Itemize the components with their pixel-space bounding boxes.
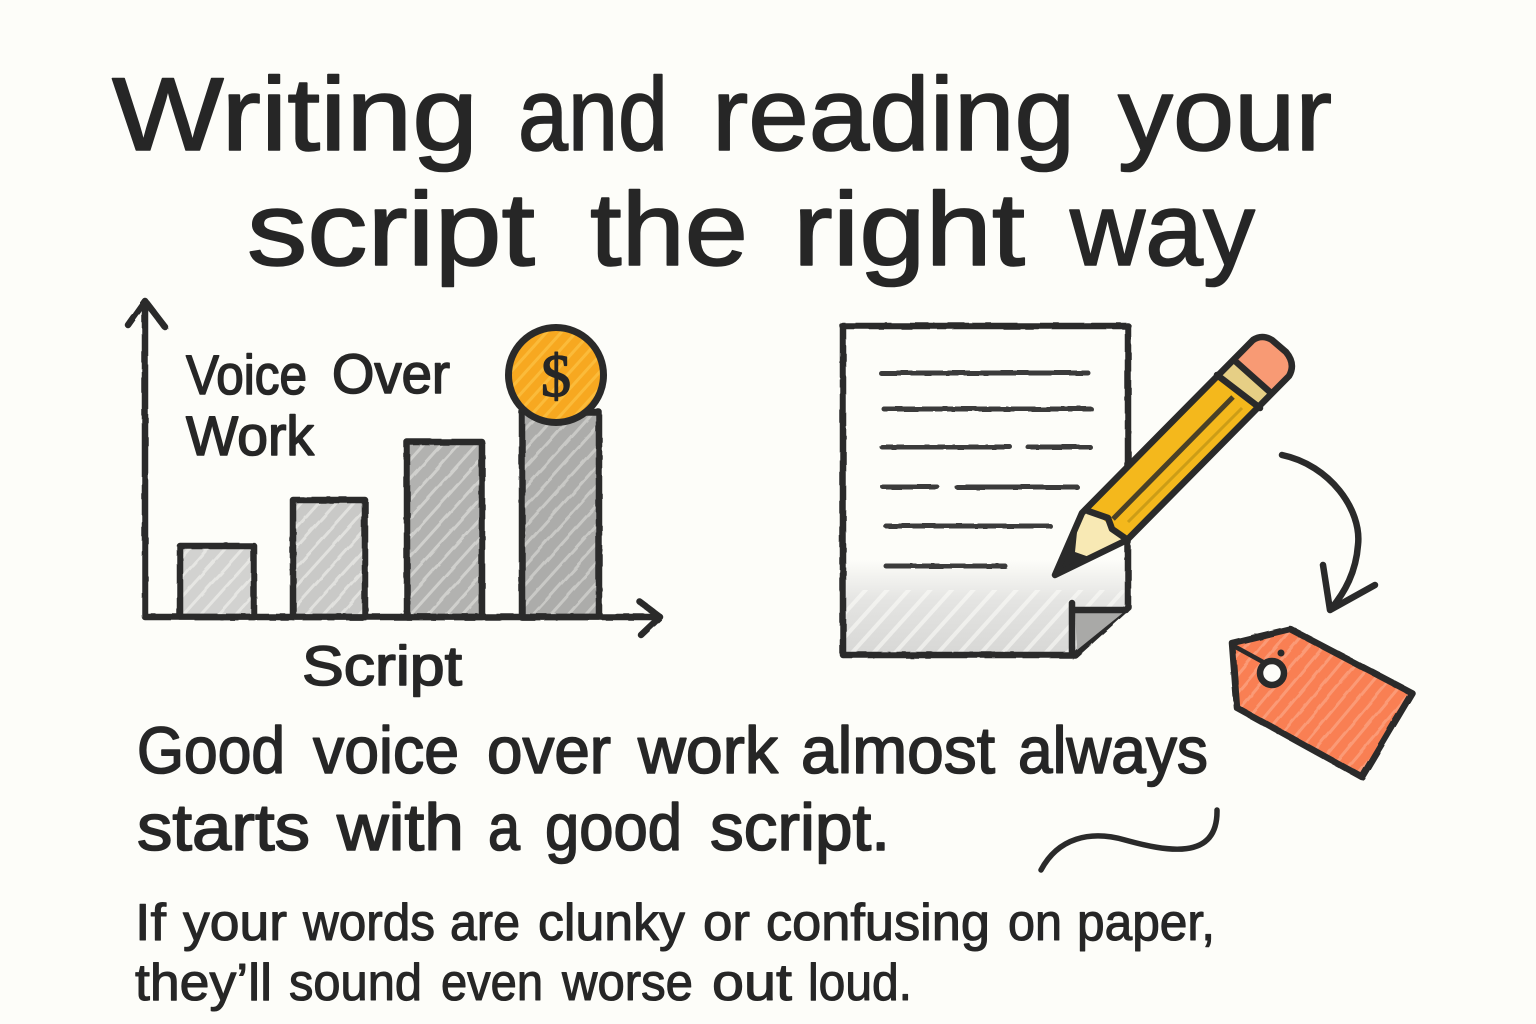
title: way (1069, 172, 1255, 288)
body text: good voice over work: over (487, 713, 611, 787)
bar 1 (180, 546, 254, 617)
body text: clunky words warning: clunky (538, 894, 685, 952)
body text: good voice over work: work (637, 713, 779, 787)
title: your (1118, 57, 1332, 173)
body text: clunky words warning (135, 894, 1215, 1012)
page shading (846, 560, 1126, 652)
body text: clunky words warning: they’ll (135, 954, 272, 1012)
squiggle decoration (1041, 810, 1217, 870)
body text: good voice over work: Good (137, 713, 285, 787)
text lines (881, 373, 1091, 566)
icon: dollar coin: $ (541, 343, 571, 409)
bar 4 (522, 412, 599, 617)
pencil tip (1055, 507, 1127, 575)
pencil body (1088, 375, 1260, 540)
title: script (247, 172, 535, 288)
body text: clunky words warning: worse (561, 954, 693, 1012)
title: the (590, 172, 748, 288)
body text: good voice over work: almost (801, 713, 995, 787)
body text: clunky words warning: If (135, 894, 167, 952)
title: and (518, 57, 668, 173)
icon: script document (843, 326, 1128, 655)
body text: good voice over work: always (1018, 713, 1208, 787)
chart axes with arrows (128, 301, 660, 635)
body text: clunky words warning: or (703, 894, 750, 952)
tag hole and string (1232, 645, 1284, 685)
ferrule (1217, 360, 1272, 408)
arrow: script to price tag (1282, 455, 1375, 610)
icon: price tag (1232, 629, 1412, 777)
y-axis label (186, 342, 450, 467)
body text: good voice over work: a (488, 790, 520, 864)
eraser (1237, 337, 1292, 392)
body text: good voice over work: good (545, 790, 682, 864)
body text: clunky words warning: your (183, 894, 287, 952)
title: Writing (112, 57, 478, 173)
title (112, 57, 1332, 288)
icon: dollar coin (508, 328, 604, 422)
y-axis label: Over (332, 342, 450, 405)
body text: good voice over work: with (336, 790, 464, 864)
bar 2 (293, 500, 365, 617)
body text: good voice over work: script. (710, 790, 890, 864)
x-axis label: Script (302, 634, 462, 697)
y-axis label: Voice (186, 343, 307, 406)
bar chart: voice over work vs script (128, 301, 660, 697)
bar 3 (407, 442, 482, 617)
pencil outline (1055, 337, 1292, 575)
body text: clunky words warning: loud. (808, 954, 912, 1012)
body text: clunky words warning: are (450, 894, 520, 952)
body text: good voice over work (137, 713, 1208, 864)
body text: clunky words warning: on (1008, 894, 1062, 952)
body text: clunky words warning: confusing (766, 894, 990, 952)
body text: clunky words warning: even (441, 954, 543, 1012)
page outline (843, 326, 1128, 655)
body text: clunky words warning: paper, (1077, 894, 1215, 952)
body text: clunky words warning: sound (289, 954, 422, 1012)
y-axis label: Work (186, 404, 315, 467)
body text: good voice over work: starts (137, 790, 310, 864)
title: reading (712, 57, 1075, 173)
body text: good voice over work: voice (313, 713, 459, 787)
title: right (793, 172, 1025, 288)
folded corner (1072, 603, 1126, 654)
icon: pencil (1055, 337, 1292, 575)
body text: clunky words warning: words (302, 894, 435, 952)
body text: clunky words warning: out (712, 954, 793, 1012)
